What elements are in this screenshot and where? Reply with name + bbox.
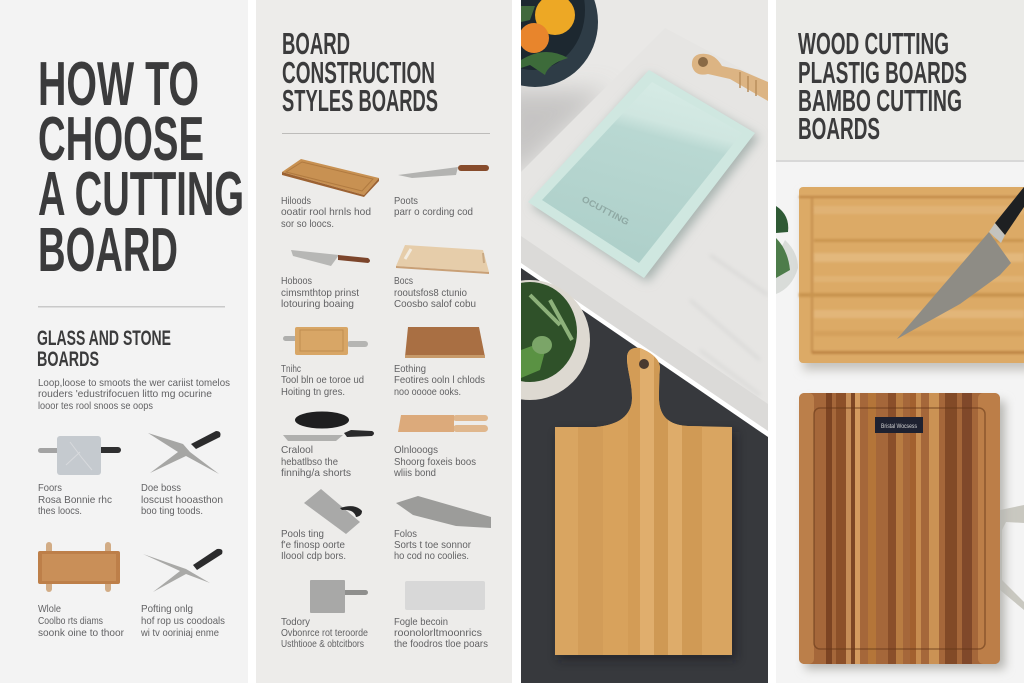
text block: item 5: Tool bln oe toroe ud	[281, 374, 364, 386]
icon: dark wood board	[405, 327, 485, 358]
text block: caption 3: Wlole	[38, 603, 61, 615]
heading: glass and stone boards: GLASS AND STONE	[37, 327, 171, 350]
text block: item 10: ho cod no coolies.	[394, 550, 469, 562]
photo: bamboo paddle board	[555, 340, 736, 660]
text block: item 11: Usthtiooe & obtcitbors	[281, 638, 364, 650]
panel: product photos	[521, 0, 768, 683]
icon: kitchen knife	[398, 165, 489, 178]
photo: dark countertop	[521, 263, 768, 683]
title: BOARD	[38, 216, 178, 285]
text block: item 4: rooutsfos8 ctunio	[394, 287, 467, 299]
text block: item 1: sor so loocs.	[281, 218, 334, 230]
text block: item 6: Eothing	[394, 363, 426, 375]
text block: caption 2: Doe boss	[141, 482, 181, 494]
text block: item 11: Todory	[281, 616, 311, 628]
text block: intro: rouders 'edustrifocuen litto mg ocurine	[38, 388, 212, 400]
text block: item 11: Ovbonrce rot teroorde	[281, 627, 368, 639]
heading: board construction styles boards: CONSTRUCTION	[282, 55, 435, 90]
glass board brand mark: OCUTTING	[580, 194, 631, 227]
text block: item 9: Iloool cdp bors.	[281, 550, 346, 562]
text block: caption 4	[140, 603, 225, 639]
text block: item 9	[281, 528, 346, 562]
text block: item 12: Fogle becoin	[394, 616, 448, 628]
text block: caption 1	[38, 482, 112, 517]
heading: board types list: BOARDS	[798, 111, 880, 146]
heading: glass and stone boards: BOARDS	[37, 348, 99, 371]
icon: board with two handles	[398, 415, 488, 432]
photo: fruit bowl	[521, 0, 598, 87]
text block: item 9: f'e finosp oorte	[281, 539, 345, 551]
text block: caption 2	[141, 482, 223, 517]
text block: item 1: Hiloods	[281, 195, 311, 207]
text block: item 7: Cralool	[281, 444, 313, 456]
photo: apron cloth	[1000, 505, 1024, 610]
text block: caption 1: Foors	[38, 482, 62, 494]
photo: wooden handle	[692, 54, 768, 101]
title: CHOOSE	[38, 105, 204, 174]
text block: intro: Loop,loose to smoots the wer cariist tomelos	[38, 377, 230, 389]
text block: item 10	[394, 528, 471, 562]
text block: item 12: the foodros tloe poars	[394, 638, 488, 650]
text block: caption 4: wi tv ooriniaj enme	[140, 627, 219, 639]
text block: caption 2: boo ting toods.	[141, 505, 203, 517]
text block: item 2	[394, 195, 473, 218]
text block: caption 1: Rosa Bonnie rhc	[38, 494, 112, 506]
text block: caption 1: thes loocs.	[38, 505, 82, 517]
text block: item 5: Hoiting tn gres.	[281, 386, 345, 398]
icon: light board	[396, 245, 489, 274]
text block: item 1: ooatir rool hrnls hod	[281, 206, 371, 218]
photo: wood board with knife	[799, 187, 1024, 370]
icon: pan and knife	[283, 412, 374, 441]
heading: board construction styles boards	[282, 26, 438, 118]
icon: stone board	[38, 436, 121, 475]
brand label	[875, 417, 923, 433]
text block: item 3: Hoboos	[281, 275, 312, 287]
text block: item 6	[394, 363, 485, 398]
brand label: Bristal Wocsess	[881, 423, 918, 430]
icon: cleaver	[291, 250, 370, 266]
text block: caption 3: Coolbo rts diams	[38, 615, 103, 627]
text block: item 6: noo ooooe ooks.	[394, 386, 461, 398]
text block: item 4: Coosbo salof cobu	[394, 298, 476, 310]
text block: caption 3: soonk oine to thoor	[38, 627, 124, 639]
text block: item 6: Feotires ooln l chlods	[394, 374, 485, 386]
title	[38, 50, 244, 285]
photo: marble slab	[521, 81, 768, 431]
photo: plant	[776, 206, 798, 294]
text block: item 8: Shoorg foxeis boos	[394, 456, 476, 468]
panel: board construction styles	[256, 0, 512, 683]
icon: pale stone slab	[405, 581, 485, 610]
text block: item 10: Sorts t toe sonnor	[394, 539, 471, 551]
icon: crossed knives	[143, 549, 222, 592]
text block: item 3	[281, 275, 359, 310]
heading: board types list	[798, 26, 967, 146]
icon: board with knife	[283, 327, 368, 355]
text block: item 8: Olnlooogs	[394, 444, 438, 456]
text block: item 2: Poots	[394, 195, 418, 207]
text block: caption 4: Pofting onlg	[141, 603, 193, 615]
text block: item 12: roonolorltmoonrics	[394, 627, 482, 639]
text block: item 7: finnihg/a shorts	[281, 467, 351, 479]
text block: intro	[38, 377, 230, 412]
text block: caption 2: loscust hooasthon	[141, 494, 223, 506]
text block: item 7	[281, 444, 351, 479]
text block: item 5: Tnihc	[281, 363, 301, 375]
icon: long wood board	[282, 159, 379, 197]
heading: board construction styles boards: STYLES BOARDS	[282, 83, 438, 118]
heading: glass and stone boards	[37, 327, 171, 371]
text block: item 3: cimsmthtop prinst	[281, 287, 359, 299]
icon: square paddle	[310, 580, 368, 613]
text block: item 4	[394, 275, 476, 310]
panel: how to choose	[0, 0, 248, 683]
title: HOW TO	[38, 50, 199, 119]
text block: item 2: parr o cording cod	[394, 206, 473, 218]
panel: board types	[776, 0, 1024, 683]
photo: glass cutting board	[528, 70, 759, 282]
text block: caption 4: hof rop us coodoals	[141, 615, 225, 627]
icon: scraper	[304, 489, 362, 534]
text block: item 11	[281, 616, 368, 650]
icon: crossed knives	[148, 431, 220, 474]
text block: item 5	[281, 363, 364, 398]
photo: herb bowl	[521, 280, 590, 400]
title: A CUTTING	[38, 160, 244, 229]
text block: item 3: lotouring boaing	[281, 298, 354, 310]
text block: item 8	[393, 444, 476, 479]
photo: striped bamboo board	[799, 393, 1005, 669]
icon: wide blade	[396, 496, 491, 528]
text block: item 7: hebatlbso the	[281, 456, 338, 468]
knife	[897, 187, 1024, 339]
text block: item 4: Bocs	[394, 275, 413, 287]
text block: item 8: wliis bond	[393, 467, 436, 479]
text block: item 10: Folos	[394, 528, 417, 540]
text block: item 1	[281, 195, 371, 230]
icon: wooden board with handles	[38, 542, 120, 592]
text block: caption 3	[38, 603, 124, 639]
text block: intro: looor tes rool snoos se oops	[38, 400, 153, 412]
text block: item 12	[394, 616, 488, 650]
text block: item 9: Pools ting	[281, 528, 324, 540]
heading: board construction styles boards: BOARD	[282, 26, 350, 61]
